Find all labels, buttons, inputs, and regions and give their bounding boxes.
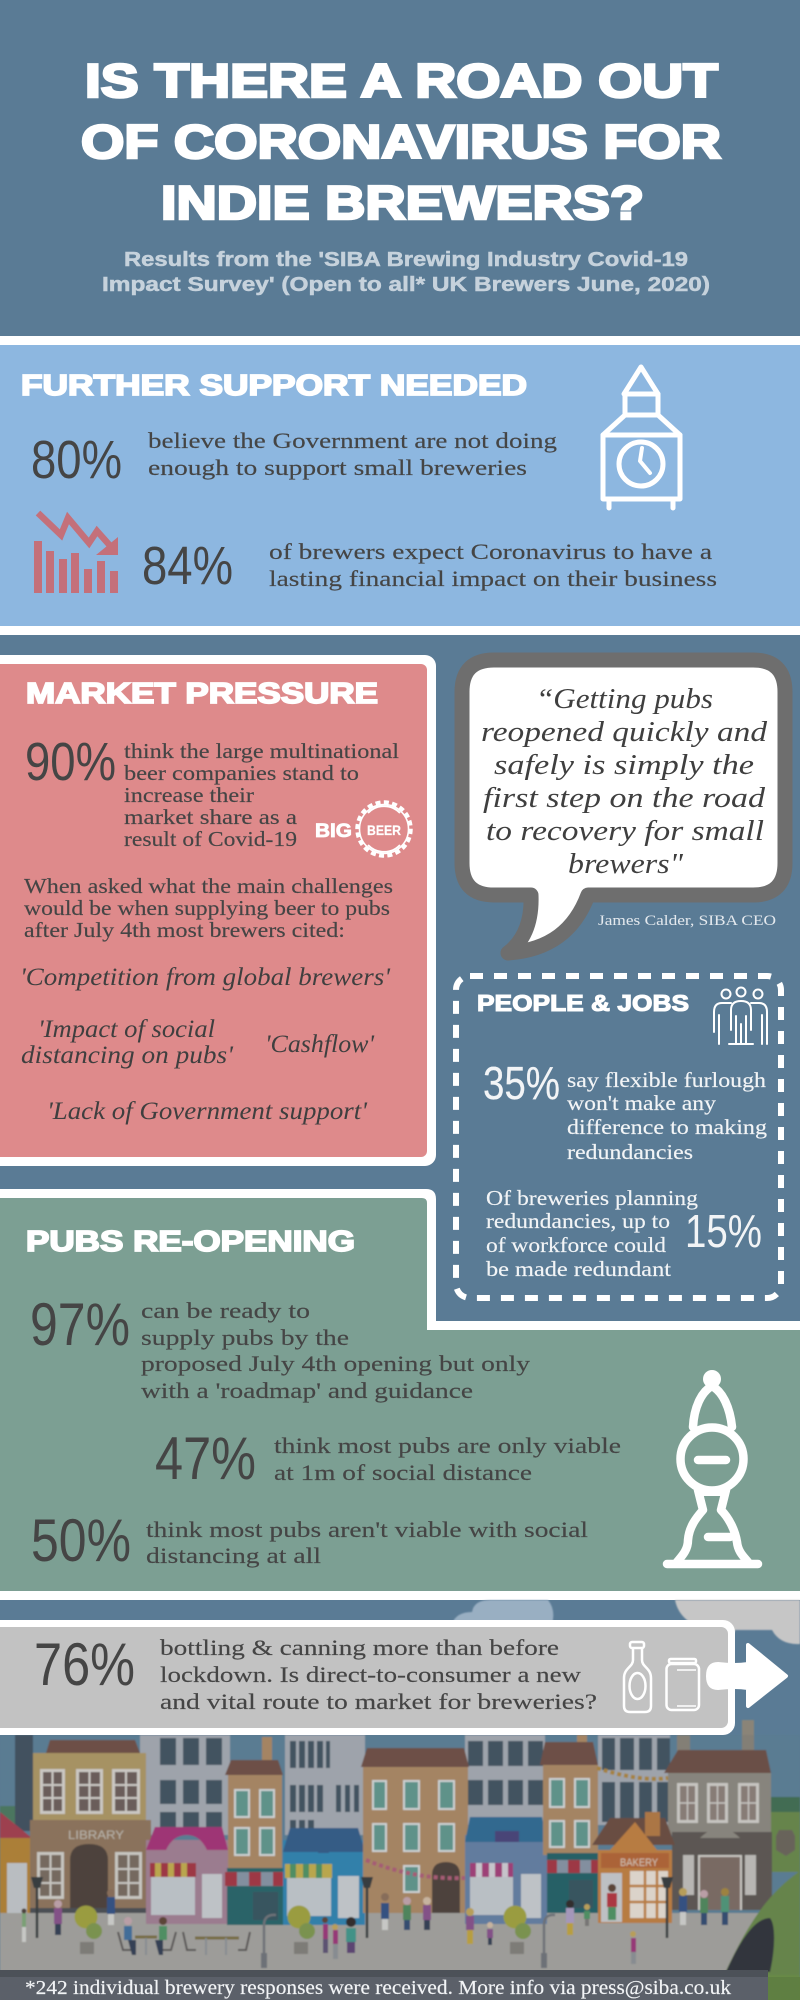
text: challenges intro: When asked what the main challenges — [24, 874, 393, 898]
text: ready to supply: supply pubs by the — [141, 1325, 349, 1350]
icon: big beer bottle cap: BIG — [315, 821, 352, 842]
text: lasting financial impact: lasting financial impact on their business — [269, 566, 717, 591]
text: flexible furlough: won't make any — [567, 1091, 717, 1115]
text: flexible furlough — [567, 1068, 768, 1164]
building: pink shop — [146, 1827, 228, 1924]
text: redundancy plans: of workforce could — [486, 1233, 667, 1257]
street furniture — [31, 1877, 673, 1968]
building: orange terrace centre — [361, 1748, 469, 1913]
speech bubble quote — [462, 660, 785, 953]
icon: can — [666, 1659, 699, 1710]
heading: people and jobs: PEOPLE & JOBS — [477, 990, 689, 1016]
bunting — [366, 1768, 668, 1878]
stat: 35%: 35% — [483, 1057, 560, 1109]
heading: market pressure: MARKET PRESSURE — [26, 678, 378, 710]
trees — [74, 1906, 531, 1954]
stat: 97%: 97% — [30, 1291, 130, 1358]
icon: people — [714, 988, 767, 1044]
text: viable at 1m — [274, 1433, 621, 1485]
title: OF CORONAVIRUS FOR — [81, 115, 721, 168]
icon: big ben clock tower — [603, 367, 680, 508]
panel: header — [0, 0, 800, 336]
text: redundancy plans: be made redundant — [486, 1257, 671, 1281]
text: government support: believe the Government are not doing — [148, 428, 557, 453]
icon: big beer bottle cap: BEER — [367, 822, 401, 838]
building: bakery: BAKERY — [620, 1857, 659, 1869]
building: left shop — [0, 1812, 33, 1913]
text: not viable — [146, 1517, 588, 1568]
text: ready to supply: can be ready to — [141, 1298, 310, 1323]
text: flexible furlough: redundancies — [567, 1140, 693, 1164]
icon: pint glass — [667, 1370, 758, 1564]
town street scene — [0, 1600, 800, 2000]
icon: bottle — [624, 1642, 651, 1712]
base strip — [30, 1908, 146, 1913]
hill and tunnel — [724, 1830, 800, 2000]
subtitle — [102, 249, 710, 296]
title: IS THERE A ROAD OUT — [85, 54, 718, 107]
text: viable at 1m: at 1m of social distance — [274, 1460, 532, 1485]
panel: bottling and canning — [0, 1620, 786, 1735]
text: not viable: think most pubs aren't viable with social — [146, 1517, 588, 1542]
attribution: James Calder, SIBA CEO — [598, 913, 776, 929]
text: multinational share: market share as a — [124, 805, 298, 829]
text: redundancy plans — [486, 1186, 699, 1281]
stat: 80%: 80% — [31, 430, 122, 490]
building: bakery — [592, 1812, 675, 1923]
people — [22, 1884, 729, 1964]
text: ready to supply: with a 'roadmap' and guidance — [141, 1378, 473, 1403]
text: multinational share: result of Covid-19 — [124, 827, 297, 851]
panel: market pressure — [0, 655, 436, 1166]
text: multinational share: beer companies stand to — [124, 761, 359, 785]
text: direct to consumer: bottling & canning more than before — [160, 1635, 559, 1660]
text: lasting financial impact: of brewers expect Coronavirus to have a — [269, 539, 712, 564]
text: government support — [148, 428, 557, 480]
green hills — [768, 1797, 800, 1872]
footer — [0, 1970, 800, 2000]
subtitle: Results from the 'SIBA Brewing Industry Covid-19 — [124, 249, 688, 271]
quote: cashflow: 'Cashflow' — [265, 1031, 375, 1058]
quote: competition: 'Competition from global brewers' — [20, 964, 391, 991]
text: viable at 1m: think most pubs are only viable — [274, 1433, 621, 1458]
background office blocks — [140, 1735, 670, 1835]
text: flexible furlough: difference to making — [567, 1115, 768, 1139]
text: direct to consumer: and vital route to market for breweries? — [160, 1689, 597, 1714]
text: flexible furlough: say flexible furlough — [567, 1068, 767, 1092]
title — [81, 54, 721, 229]
stat: 84%: 84% — [142, 536, 233, 596]
text: multinational share — [124, 739, 399, 851]
stat: 15%: 15% — [685, 1205, 762, 1257]
stat: 90%: 90% — [25, 732, 116, 792]
text: redundancy plans: Of breweries planning — [486, 1186, 699, 1210]
text: ready to supply — [141, 1298, 530, 1403]
stat: 47%: 47% — [155, 1425, 256, 1492]
heading: further support needed: FURTHER SUPPORT NEEDED — [21, 370, 527, 402]
heading: pubs re-opening: PUBS RE-OPENING — [26, 1226, 355, 1258]
text: direct to consumer: lockdown. Is direct-to-consumer a new — [160, 1662, 581, 1687]
stat: 76%: 76% — [34, 1631, 135, 1698]
text: challenges intro: would be when supplying beer to pubs — [24, 896, 390, 920]
building: orange terrace left — [225, 1737, 283, 1925]
text: government support: enough to support small breweries — [148, 455, 527, 480]
quote: impact of social distancing: 'Impact of social — [38, 1016, 215, 1043]
icon: big beer bottle cap — [315, 802, 410, 856]
title: INDIE BREWERS? — [161, 176, 644, 229]
building: orange terrace right — [540, 1735, 598, 1913]
icon: falling bar chart — [34, 513, 118, 593]
building: library: LIBRARY — [68, 1828, 124, 1842]
speech bubble quote: safely is simply the — [494, 750, 754, 781]
text: challenges intro — [24, 874, 393, 942]
speech bubble quote: brewers" — [568, 849, 683, 880]
subtitle: Impact Survey' (Open to all* UK Brewers June, 2020) — [102, 274, 710, 296]
text: lasting financial impact — [269, 539, 717, 591]
text: direct to consumer — [160, 1635, 597, 1714]
quote: lack of government support: 'Lack of Government support' — [47, 1098, 368, 1125]
quote: impact of social distancing — [21, 1016, 234, 1069]
text: challenges intro: after July 4th most brewers cited: — [24, 918, 345, 942]
speech bubble quote: reopened quickly and — [481, 717, 768, 748]
text: not viable: distancing at all — [146, 1543, 321, 1568]
building: slate blue shop — [465, 1817, 547, 1924]
stat: 50%: 50% — [31, 1507, 131, 1574]
speech bubble quote: “Getting pubs — [536, 684, 713, 715]
panel: further support needed — [0, 345, 800, 626]
building: blue shop — [283, 1828, 365, 1925]
dim overlay — [0, 1735, 800, 1975]
panel: people and jobs — [456, 976, 781, 1298]
speech bubble quote: to recovery for small — [486, 816, 764, 847]
text: redundancy plans: redundancies, up to — [486, 1209, 670, 1233]
speech bubble quote: first step on the road — [483, 783, 766, 814]
clouds — [452, 1600, 800, 1644]
arrow — [708, 1645, 786, 1706]
text: multinational share: think the large multinational — [124, 739, 399, 763]
quote: impact of social distancing: distancing on pubs' — [21, 1042, 234, 1069]
panel: pubs re-opening — [0, 1189, 800, 1600]
footer: *242 individual brewery responses were received. More info via press@siba.co.uk — [25, 1977, 731, 1999]
text: multinational share: increase their — [124, 783, 254, 807]
building: library — [30, 1740, 151, 1913]
text: ready to supply: proposed July 4th opening but only — [141, 1351, 530, 1376]
building: pub — [664, 1720, 772, 1910]
